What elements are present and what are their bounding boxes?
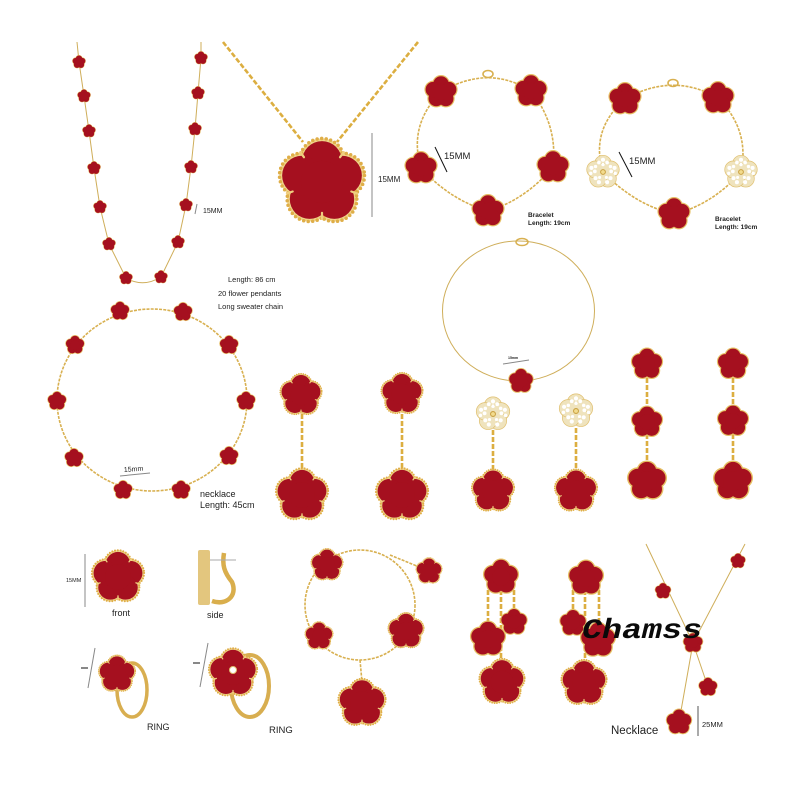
bracelet with diamond flowers: 15MM xyxy=(629,156,655,167)
product description text: Length: 86 cm xyxy=(228,275,276,284)
earring front view xyxy=(66,550,144,618)
round necklace 45cm: necklace xyxy=(200,489,236,499)
four-flower earrings xyxy=(470,558,616,704)
earring front view: 15MM xyxy=(66,578,82,584)
product description text: Long sweater chain xyxy=(218,302,283,311)
product description text xyxy=(218,275,283,311)
bracelet with diamond flowers xyxy=(587,80,757,231)
earring side view xyxy=(198,550,236,620)
bracelet five red flowers xyxy=(404,70,570,227)
ring one xyxy=(81,648,170,732)
thin bracelet with single flower xyxy=(442,238,594,393)
charm bracelet xyxy=(305,549,442,725)
bracelet with diamond flowers: Bracelet xyxy=(715,216,741,223)
earring front view: front xyxy=(112,608,131,618)
round necklace 45cm: 15mm xyxy=(124,466,144,474)
earring side view: side xyxy=(207,610,224,620)
long necklace with small flowers xyxy=(72,42,223,284)
ring one: RING xyxy=(147,722,170,732)
two-flower earrings xyxy=(276,373,428,519)
three-flower drop earrings xyxy=(627,348,753,500)
bracelet five red flowers: Length: 19cm xyxy=(528,220,570,227)
round necklace 45cm xyxy=(47,301,256,510)
large pendant necklace xyxy=(223,42,418,222)
Y necklace: 25MM xyxy=(702,720,723,729)
bracelet with diamond flowers: Length: 19cm xyxy=(715,224,757,231)
Y necklace: Necklace xyxy=(611,725,658,737)
bracelet five red flowers: Bracelet xyxy=(528,212,554,219)
ring two with diamond center: RING xyxy=(269,725,293,736)
Y necklace xyxy=(611,544,746,737)
round necklace 45cm: Length: 45cm xyxy=(200,500,255,510)
thin bracelet with single flower: 15mm xyxy=(508,356,518,360)
ring two with diamond center xyxy=(193,643,293,736)
bracelet five red flowers: 15MM xyxy=(444,151,470,162)
product description text: 20 flower pendants xyxy=(218,289,282,298)
long necklace with small flowers: 15MM xyxy=(203,208,223,215)
diamond and red earrings xyxy=(472,394,597,511)
large pendant necklace: 15MM xyxy=(378,175,401,184)
watermark: Chamss xyxy=(582,616,702,647)
